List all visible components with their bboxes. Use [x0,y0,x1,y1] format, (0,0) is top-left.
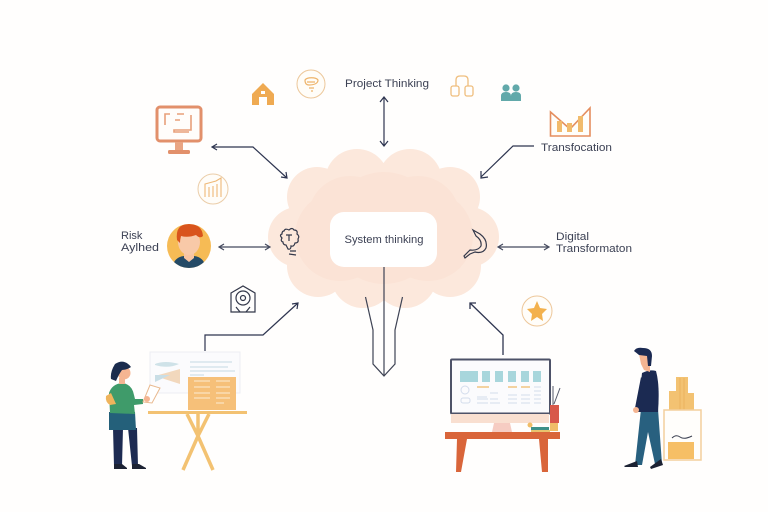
icon: puzzle bulb [280,228,299,255]
icon: star badge [522,296,552,326]
label: Risk Aylhed: Aylhed [121,242,159,254]
label: Risk Aylhed: Risk [121,230,143,242]
label: Digital Transformaton: Transformaton [556,243,632,255]
monitor [451,360,550,432]
illustration: desk with computer [445,360,560,472]
label: Project Thinking: Project Thinking [345,78,429,90]
box with rolls [664,377,701,460]
icon: house [252,83,274,105]
label: Digital Transformaton: Digital [556,231,589,243]
icon: chart frame [550,108,590,136]
icon: people [501,84,521,101]
illustration: man with box [624,348,701,469]
label: Transfocation: Transfocation [541,142,612,154]
woman [106,362,160,469]
arrow: presenter to cloud [205,303,298,351]
arrow: transfocation to cloud [481,146,534,178]
orange document [188,377,236,410]
arrow: monitor to cloud [212,144,287,178]
easel table [148,412,247,470]
icon: monitor [157,107,201,154]
arrow: project thinking to cloud [380,97,388,146]
icon: circled lamp [297,70,325,98]
center label box: System thinking [344,234,424,246]
man [624,348,663,469]
arrow: digital transformation to cloud [498,244,549,250]
icon: circled bar chart [198,174,228,204]
table [445,432,560,472]
pen cup and books [528,386,560,432]
icon: camera badge [231,286,255,312]
central cloud [268,149,499,308]
presentation board [150,352,240,393]
funnel stem below cloud [366,267,402,376]
avatar [167,224,211,268]
label: Risk Aylhed [121,230,159,254]
illustration: presenter with board [106,352,247,470]
arrow: avatar to cloud [219,244,270,250]
icon: hand curve [464,230,486,258]
icon: hierarchy [451,76,473,96]
label: Digital Transformaton [556,231,632,255]
center label box [330,212,437,267]
arrow: desk to cloud [470,303,503,355]
